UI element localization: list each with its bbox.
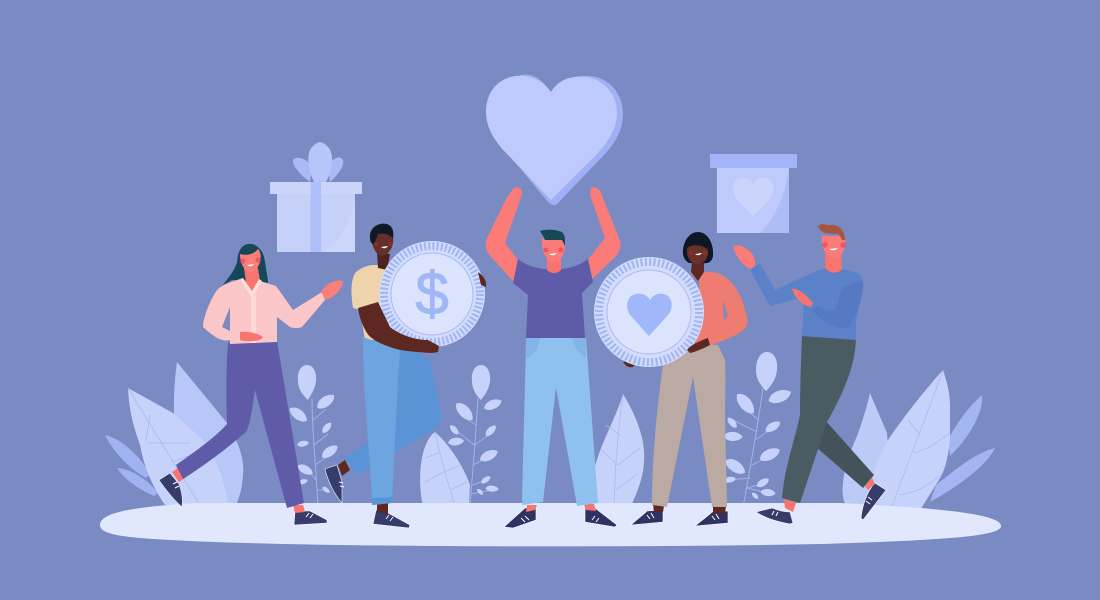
back leg	[811, 420, 874, 488]
top	[690, 272, 748, 345]
coin: $	[415, 260, 449, 327]
shoes	[756, 483, 886, 524]
person: woman in pink blouse	[159, 244, 343, 525]
trousers	[176, 341, 304, 508]
plant 3	[723, 352, 793, 507]
heart on gift	[733, 178, 773, 216]
shirt	[513, 259, 593, 338]
jeans back leg	[345, 337, 441, 475]
hair	[818, 224, 845, 240]
center leaf	[594, 394, 644, 508]
ground platform	[100, 503, 1001, 546]
neck and face	[825, 250, 842, 275]
crossed arm	[812, 282, 863, 328]
front leg	[782, 336, 856, 503]
ankles	[172, 468, 185, 482]
ankles	[653, 504, 664, 512]
right foliage cluster	[843, 370, 995, 514]
shirt	[351, 265, 395, 340]
neck and face	[377, 252, 390, 270]
hair	[540, 230, 565, 246]
shoes	[504, 508, 617, 528]
person: woman holding heart coin	[594, 232, 748, 526]
ankles	[526, 505, 537, 512]
coin	[379, 241, 485, 347]
blouse	[203, 279, 325, 344]
icon: large heart	[486, 74, 623, 205]
neck and face	[244, 268, 260, 295]
hair	[223, 244, 268, 285]
arm	[358, 302, 439, 353]
hair	[370, 224, 393, 245]
plant 1	[287, 365, 340, 505]
ankles	[338, 460, 350, 476]
shoes	[325, 465, 410, 528]
trousers	[652, 343, 727, 507]
upper hand	[687, 338, 710, 353]
icon: gift box with heart	[710, 154, 797, 233]
shoes	[159, 473, 327, 525]
leaf behind man with dollar coin	[420, 432, 470, 506]
hands	[240, 332, 263, 341]
neck and face	[691, 262, 704, 281]
jeans	[522, 338, 598, 506]
shoes	[631, 510, 728, 526]
person: man holding dollar coin	[325, 224, 486, 528]
jeans front leg	[363, 337, 400, 505]
neck and face	[547, 258, 561, 273]
coin	[594, 257, 704, 367]
person: man in blue sweater	[733, 224, 886, 524]
lower hand	[623, 361, 636, 367]
person: man with raised arms	[486, 187, 620, 528]
plant 2	[448, 365, 503, 505]
icon: gift box with bow	[270, 142, 362, 252]
sweater	[750, 263, 863, 340]
left foliage cluster	[105, 362, 243, 505]
arm left	[486, 187, 522, 282]
hair	[683, 232, 713, 263]
hands	[792, 289, 813, 307]
arm right	[586, 187, 620, 281]
ankles	[784, 499, 796, 512]
